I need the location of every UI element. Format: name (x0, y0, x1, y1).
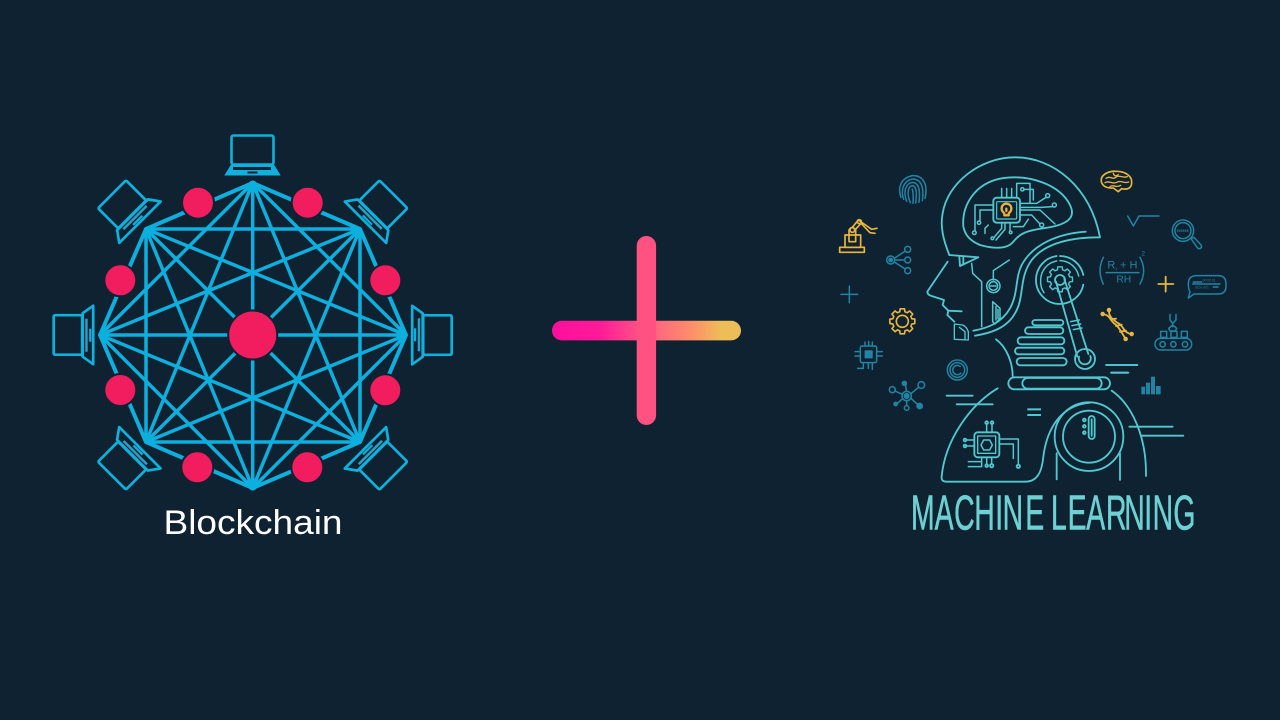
icon: robot arm (840, 220, 877, 252)
shoulder ring (1055, 402, 1123, 480)
icon: speech bubble (1188, 276, 1226, 298)
brain chip (993, 198, 1020, 223)
jaw (954, 324, 968, 340)
ear joint with gear (1036, 256, 1083, 304)
laptop: top left (91, 174, 161, 243)
red nodes (104, 187, 401, 483)
formula: + H (1120, 260, 1137, 272)
icon: plus yellow (1158, 277, 1173, 292)
formula: R (1107, 260, 1115, 272)
left icons (840, 176, 926, 410)
right shoulder (1112, 391, 1146, 476)
formula: 1 (1115, 266, 1118, 271)
helmet outline (942, 157, 1100, 336)
icon: conveyor robot (1155, 314, 1192, 350)
right icons (1100, 171, 1226, 394)
torso chip (964, 421, 1020, 468)
laptop: bottom right (345, 427, 414, 496)
accent lines (947, 396, 1183, 436)
formula: RH (1116, 275, 1131, 286)
icon: yellow brain (1101, 171, 1132, 192)
brain circuits (972, 183, 1056, 240)
formula (1100, 252, 1146, 286)
machine learning title: MACHINE LEARNING (911, 487, 1196, 541)
icon: DNA helix (1101, 309, 1133, 340)
eye (949, 255, 978, 266)
plus horizontal bar (552, 321, 741, 340)
robot arm (1056, 279, 1095, 369)
icon: speech bubble: 0101 001 (1195, 286, 1209, 290)
icon: teal chip (855, 341, 882, 369)
plus sign (552, 236, 741, 425)
network mesh lines (100, 183, 406, 488)
icon: speech bubble: 00:00 01 (1203, 278, 1216, 282)
helmet inner line (973, 232, 1086, 331)
left shoulder (942, 388, 1090, 482)
laptop: right (412, 306, 452, 364)
laptop: top right (345, 174, 414, 243)
brain outline (963, 177, 1072, 248)
neck line (996, 339, 1013, 376)
face profile (927, 262, 962, 322)
neck circuit lines (972, 260, 1009, 327)
icon: square root (1128, 216, 1159, 226)
icon: light bulb (1002, 204, 1011, 215)
collar bar (1008, 377, 1110, 389)
laptop: left (54, 306, 93, 364)
icon: plus teal (841, 286, 858, 303)
equals mark (1027, 409, 1041, 415)
icon: ear gear (1048, 267, 1072, 292)
laptop: top (224, 136, 281, 176)
icon: magnifier (1172, 220, 1201, 249)
icon: share nodes (887, 246, 911, 274)
plus vertical bar (637, 236, 656, 425)
network vertices (98, 180, 408, 490)
laptop: bottom left (91, 427, 161, 496)
formula: 2 (1142, 252, 1146, 258)
icon: concentric circle (947, 360, 967, 380)
icon: node network (889, 381, 925, 410)
machine learning robot head (927, 157, 1137, 389)
short accent lines (1106, 365, 1137, 373)
robot torso (942, 388, 1183, 482)
label: Blockchain: Blockchain (164, 504, 342, 542)
icon: yellow gear (890, 309, 915, 334)
icon: accent lines (1107, 365, 1137, 373)
blockchain network diagram (54, 136, 452, 496)
stacked ribs (1015, 320, 1067, 365)
icon: fingerprint (900, 176, 926, 203)
icon: bar chart (1141, 377, 1161, 394)
